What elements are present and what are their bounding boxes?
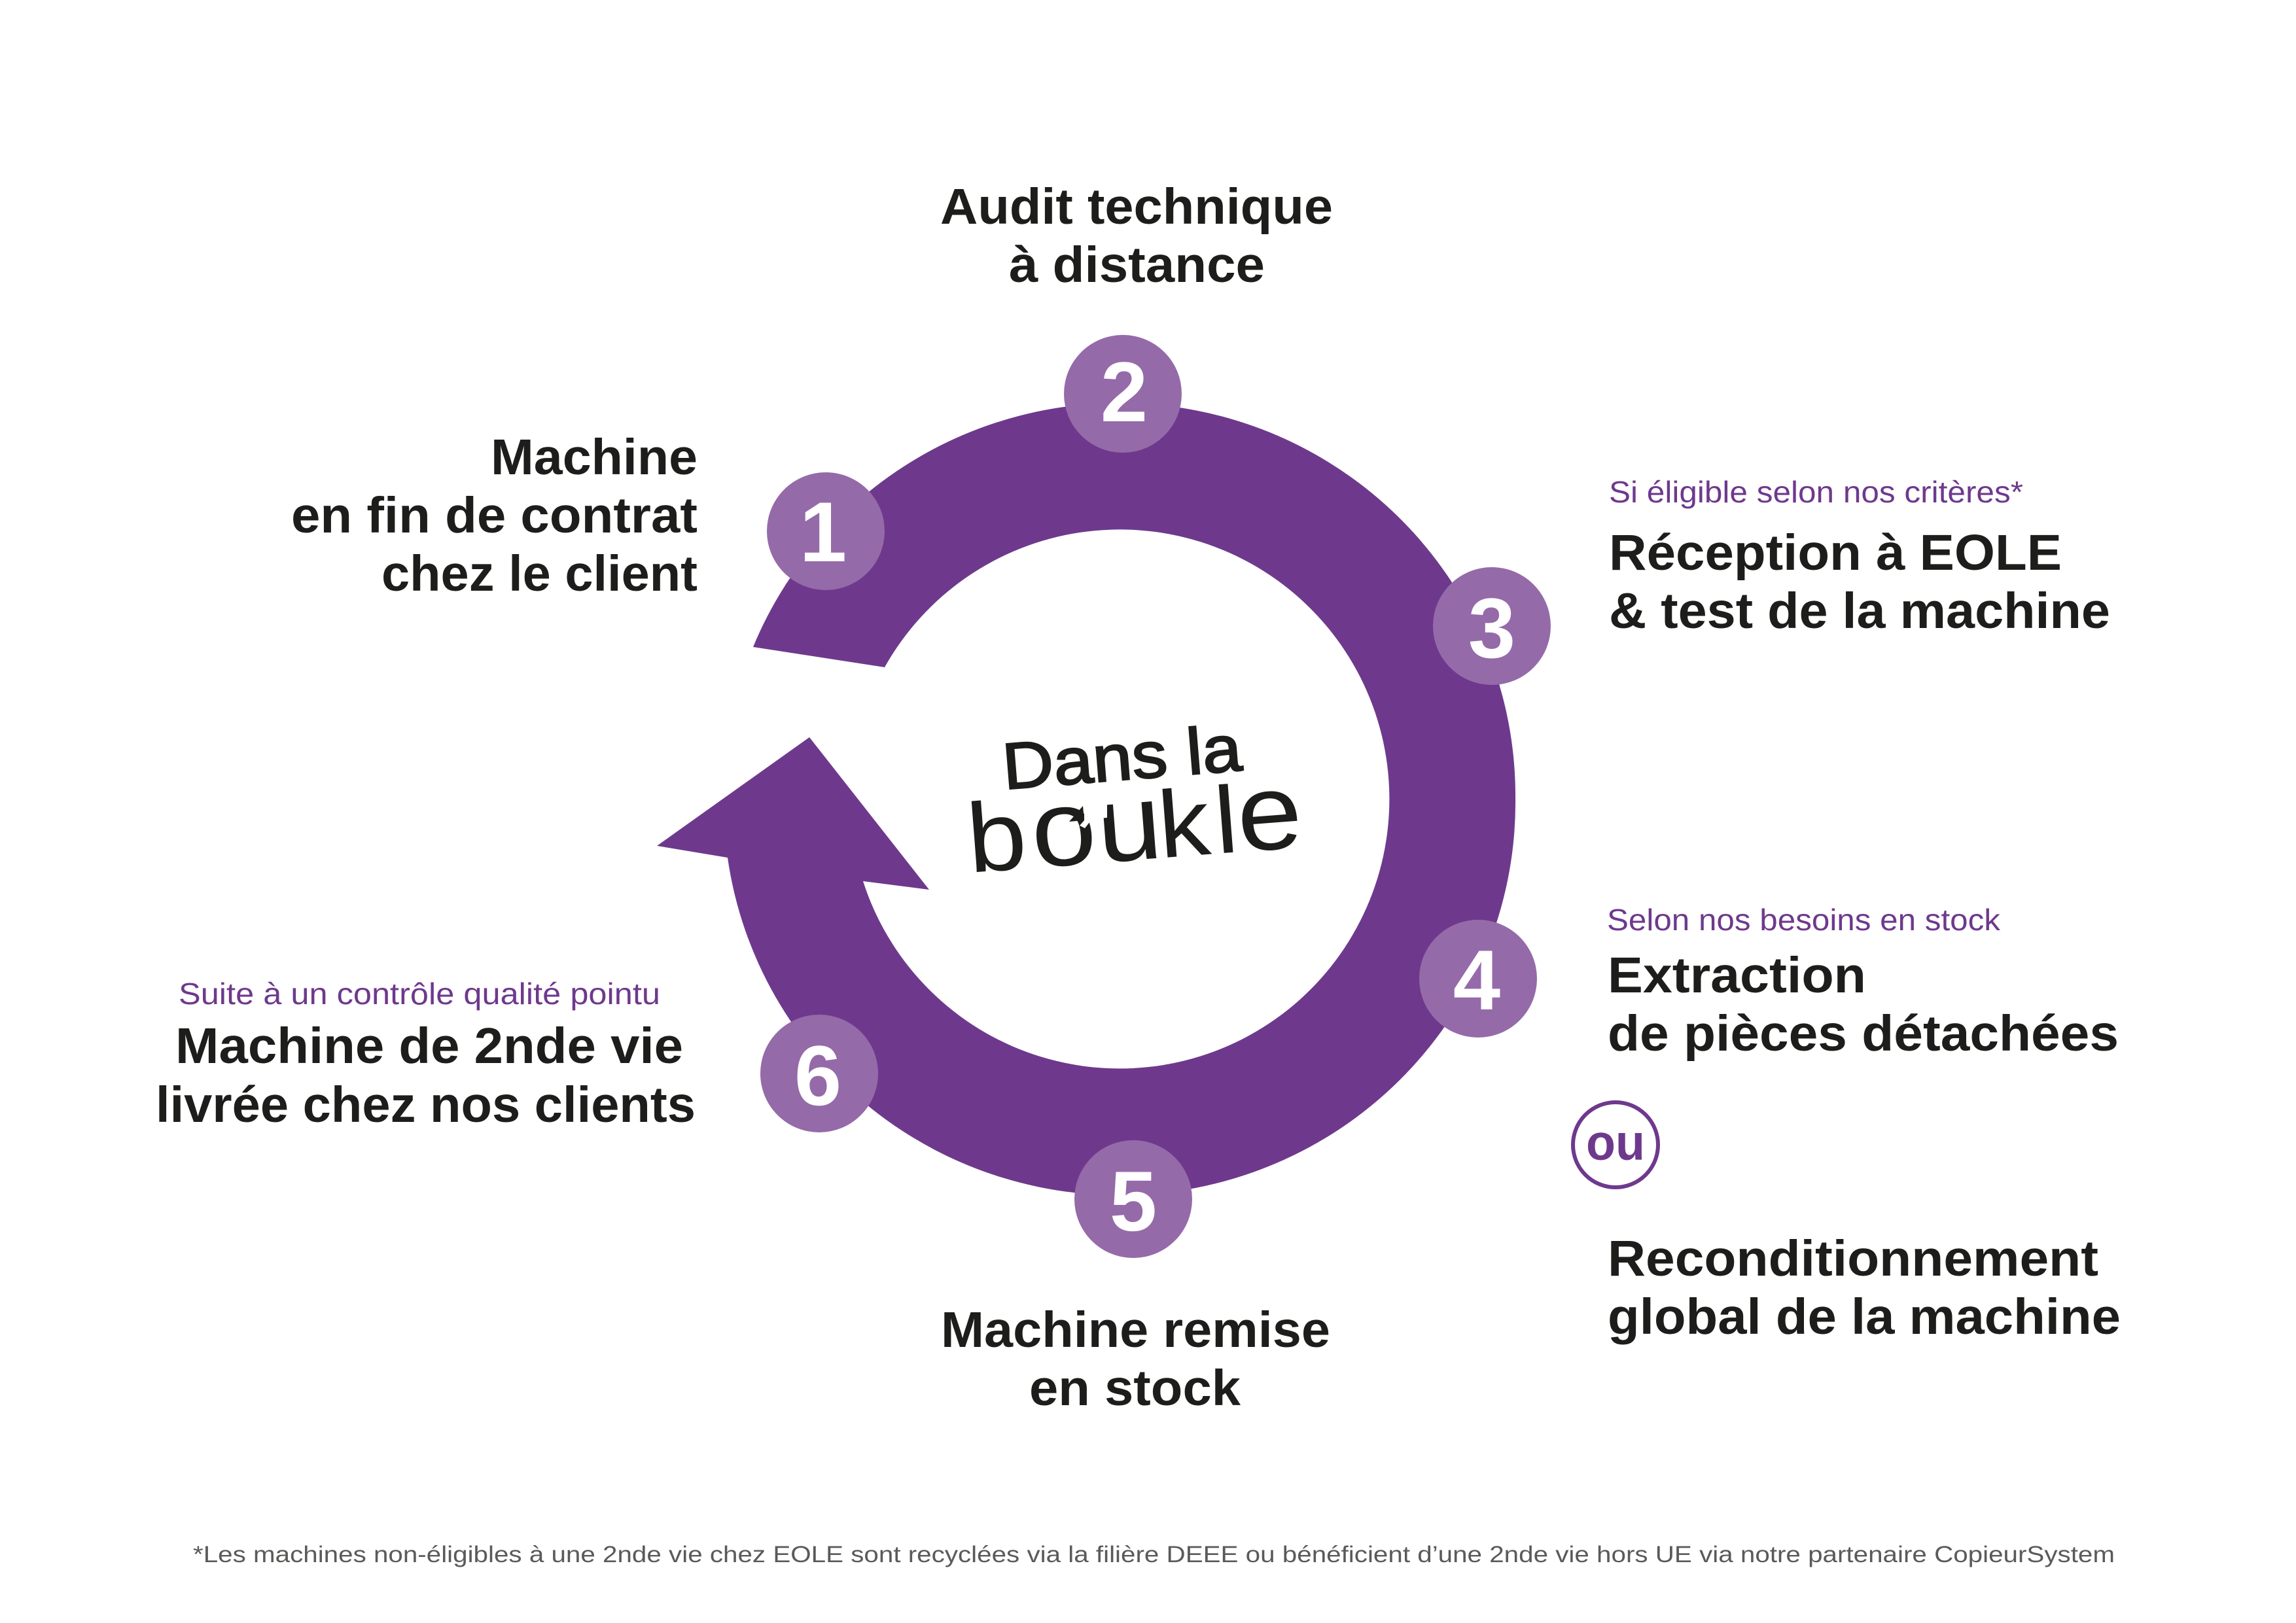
ou badge: ou — [1586, 1115, 1645, 1171]
step 6 label — [156, 977, 696, 1133]
step 1 label — [291, 429, 698, 602]
step 6 label: livrée chez nos clients — [156, 1077, 696, 1133]
step 4 label: Reconditionnement — [1608, 1230, 2098, 1287]
step 1 badge — [767, 472, 885, 590]
step 3 label — [1609, 475, 2110, 639]
step 4 label — [1607, 903, 2121, 1345]
step 2 label: à distance — [1009, 237, 1265, 293]
step 6 badge — [760, 1015, 878, 1132]
step 3 badge: 3 — [1468, 580, 1515, 676]
step 2 label: Audit technique — [940, 179, 1333, 235]
logo text: boukle: e — [1232, 750, 1306, 875]
step 5 label: en stock — [1029, 1360, 1241, 1416]
step 1 badge: 1 — [800, 484, 847, 580]
step 1 label: Machine — [491, 429, 698, 485]
step 2 badge — [1064, 335, 1182, 453]
logo text: boukle: l — [1210, 766, 1241, 873]
step 2 label — [940, 179, 1333, 293]
step 4 label: Extraction — [1608, 947, 1866, 1003]
step 6 badge: 6 — [794, 1028, 841, 1123]
logo o arrow gap and head — [1069, 802, 1107, 828]
step 3 label: & test de la machine — [1609, 583, 2110, 639]
step 6 label: Machine de 2nde vie — [175, 1018, 683, 1074]
step 6 condition note: Suite à un contrôle qualité pointu — [179, 977, 660, 1011]
step 5 badge — [1074, 1140, 1192, 1258]
logo text: boukle: u — [1092, 761, 1166, 886]
step 4 condition note: Selon nos besoins en stock — [1607, 903, 2001, 937]
logo text: boukle: k — [1154, 768, 1214, 878]
cycle arrow ring — [657, 403, 1515, 1195]
step 5 label: Machine remise — [941, 1302, 1330, 1358]
step 4 badge — [1419, 920, 1537, 1038]
step 1 label: chez le client — [381, 546, 698, 602]
step 5 badge: 5 — [1110, 1153, 1157, 1249]
ou badge — [1573, 1102, 1658, 1187]
logo text: boukle: b — [963, 780, 1031, 894]
step 4 label: global de la machine — [1608, 1289, 2121, 1345]
step 2 badge: 2 — [1101, 344, 1148, 440]
step 4 badge: 4 — [1453, 932, 1500, 1028]
logo text: Dans la: Dans la — [1000, 711, 1245, 803]
step 3 condition note: Si éligible selon nos critères* — [1609, 475, 2023, 509]
step 1 label: en fin de contrat — [291, 487, 698, 544]
step 3 badge — [1433, 567, 1551, 685]
step 3 label: Réception à EOLE — [1609, 525, 2062, 581]
center logo: Dans la boukle — [963, 711, 1306, 896]
footnote: *Les machines non-éligibles à une 2nde vie chez EOLE sont recyclées via la filière DEEE ou bénéficient d’une 2nde vie hors UE via notre partenaire CopieurSystem — [193, 1542, 2115, 1567]
step 5 label — [941, 1302, 1330, 1416]
step 4 label: de pièces détachées — [1608, 1005, 2119, 1062]
logo text: boukle: o — [1027, 766, 1101, 891]
